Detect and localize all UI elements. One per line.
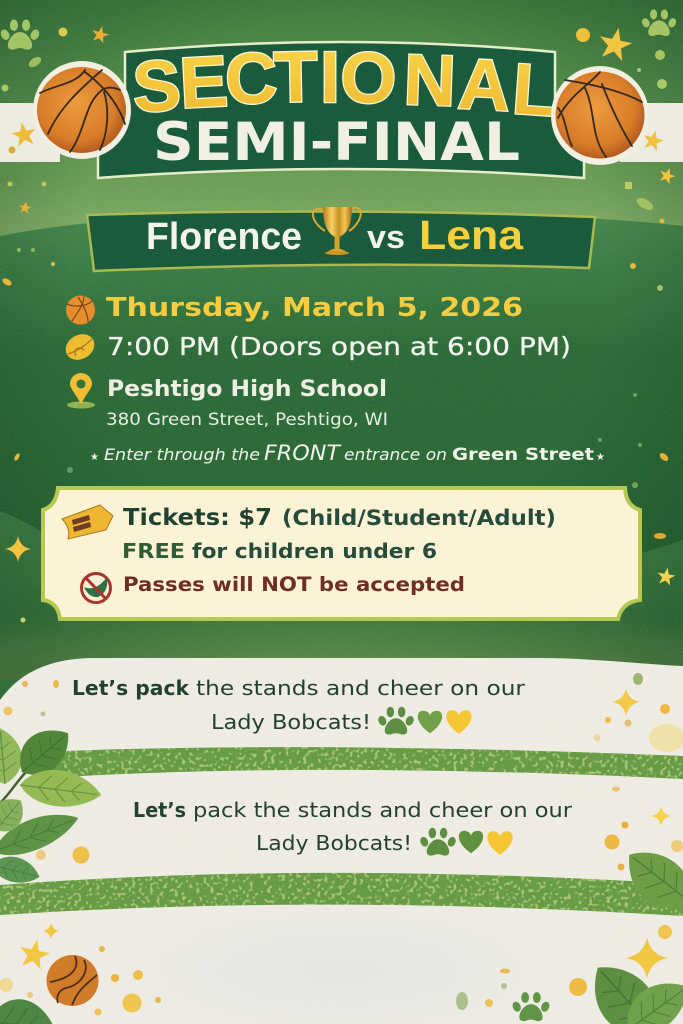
icons: message two paw and hearts	[419, 828, 513, 856]
icon: bottom paw	[511, 992, 551, 1021]
banner shape	[87, 211, 595, 271]
panel: lower cream area	[0, 658, 683, 1024]
matchup banner	[87, 207, 595, 271]
background: left hill	[0, 511, 60, 640]
icon: no passes	[82, 574, 110, 602]
entrance note: entrance on	[344, 445, 447, 464]
leaves: bottom right	[577, 951, 683, 1024]
entrance note	[90, 441, 605, 465]
left white ribbon	[0, 103, 60, 162]
message one: Let’s pack	[72, 676, 190, 700]
team: Lena: Lena	[419, 212, 524, 258]
team: Florence: Florence	[146, 216, 302, 258]
icon: trophy	[313, 207, 361, 255]
title line two: SEMI-FINAL	[153, 112, 520, 173]
icon: time ball	[61, 329, 99, 365]
leaf: bottom left	[0, 997, 56, 1024]
message two: pack the stands and cheer on our	[193, 798, 573, 822]
green band two	[0, 873, 683, 916]
panel: tickets	[43, 488, 640, 619]
time: 7:00 PM (Doors open at 6:00 PM)	[107, 332, 571, 361]
message one: the stands and cheer on our	[196, 676, 526, 700]
icon: ticket	[62, 505, 113, 539]
entrance note: ★	[90, 452, 99, 463]
leaf: right middle	[614, 838, 683, 922]
background: right hill	[625, 540, 683, 640]
address: 380 Green Street, Peshtigo, WI	[106, 410, 388, 430]
right white ribbon	[620, 103, 683, 162]
band speckle	[0, 740, 683, 920]
green band one	[40, 747, 683, 779]
entrance note: ★	[596, 452, 605, 463]
message two	[133, 798, 573, 855]
lower area tint	[80, 890, 600, 1024]
confetti: lower	[0, 673, 683, 1021]
icon: date basketball	[66, 296, 95, 324]
icon: top right paw	[641, 9, 677, 36]
message one	[72, 676, 526, 734]
icon: top left paw	[0, 20, 41, 50]
title line one: SECTIONAL	[131, 37, 559, 132]
message two: Let’s	[133, 798, 186, 822]
word: vs: vs	[367, 219, 405, 255]
confetti: upper	[0, 9, 677, 623]
message one: Lady Bobcats!	[211, 710, 371, 734]
panel shape	[43, 488, 640, 619]
message two: Lady Bobcats!	[256, 831, 412, 855]
passes warning: Passes will NOT be accepted	[123, 573, 465, 596]
entrance note: Enter through the	[104, 445, 260, 464]
title banner	[98, 37, 584, 178]
entrance note: FRONT	[264, 441, 342, 465]
icon: location pin	[67, 373, 95, 408]
icon: bottom basketball	[46, 955, 98, 1006]
free note: for children under 6	[192, 539, 437, 563]
background: vignette	[0, 0, 683, 680]
free note: FREE	[122, 539, 185, 563]
icon: left basketball	[33, 61, 131, 159]
background: upper green	[0, 0, 683, 300]
ticket categories: (Child/Student/Adult)	[282, 506, 556, 530]
banner shape	[98, 42, 584, 178]
entrance note: Green Street	[452, 445, 594, 465]
leaves: left cluster	[0, 717, 104, 888]
ticket price: Tickets: $7	[123, 505, 272, 531]
icons: message one paw and hearts	[377, 707, 472, 735]
venue name: Peshtigo High School	[107, 377, 387, 402]
date: Thursday, March 5, 2026	[106, 293, 523, 323]
background: dark green field	[0, 212, 683, 680]
icon: right basketball	[551, 66, 649, 165]
